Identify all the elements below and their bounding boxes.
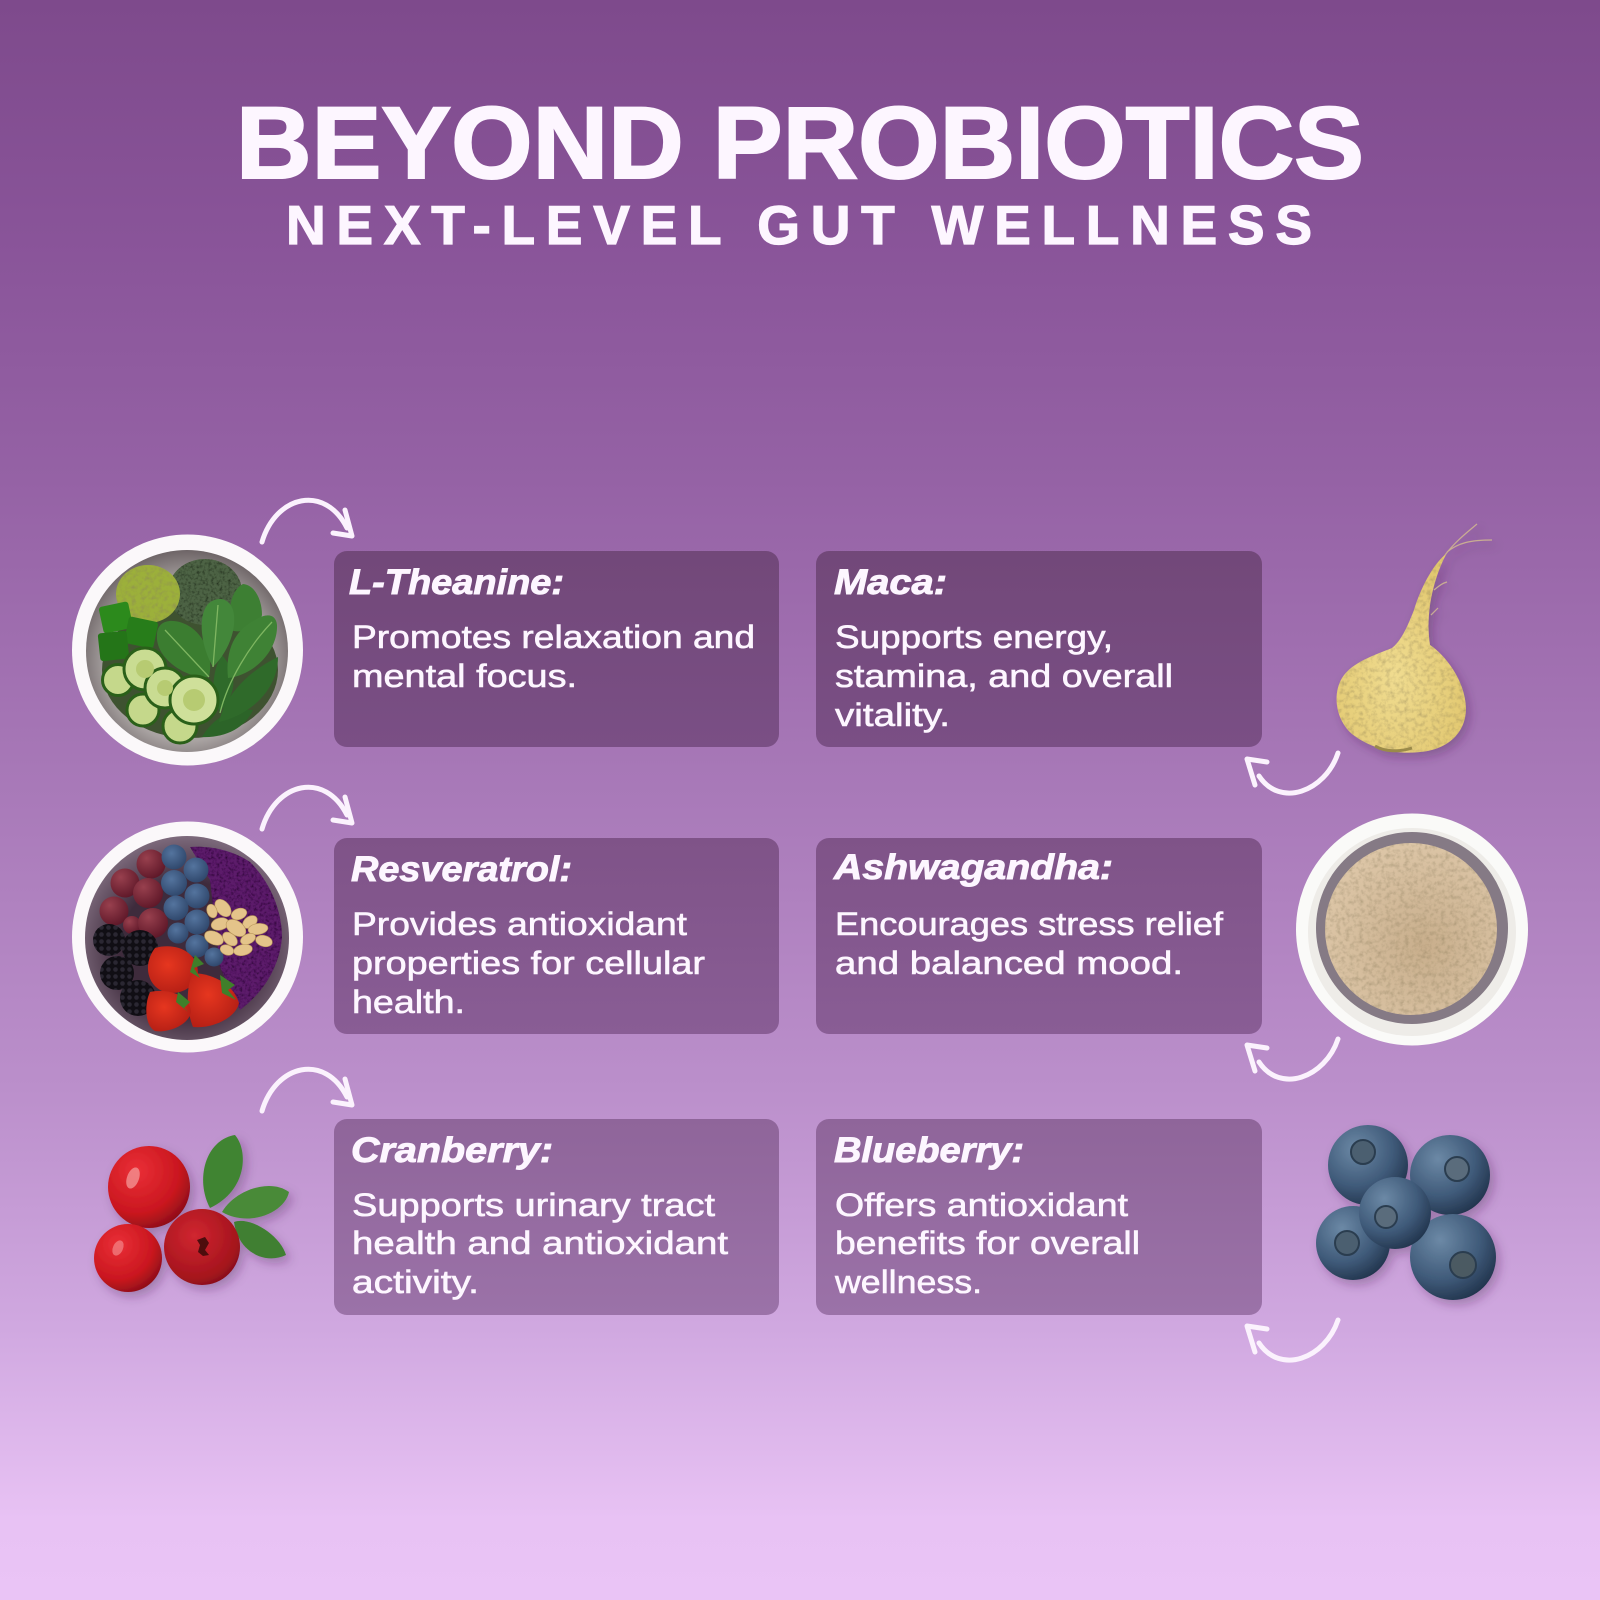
text: Cranberry description: health and antioxidant — [352, 1225, 728, 1261]
text: Maca description: stamina, and overall — [835, 658, 1173, 694]
heading: L-Theanine: L-Theanine: — [349, 563, 564, 602]
heading: Blueberry: Blueberry: — [834, 1131, 1024, 1170]
text: Blueberry description — [834, 1187, 1140, 1300]
text: L-Theanine description: mental focus. — [352, 658, 577, 694]
text: Resveratrol description: health. — [352, 984, 465, 1020]
text: Blueberry description: benefits for overall — [835, 1225, 1140, 1261]
icon: cranberries with leaves — [94, 1135, 289, 1292]
heading: Cranberry: Cranberry: — [351, 1131, 553, 1170]
icon: blueberries — [1316, 1125, 1496, 1300]
text: Maca description — [835, 619, 1173, 733]
arrow: ashwagandha to card — [1247, 1039, 1338, 1079]
text: L-Theanine description: Promotes relaxation and — [352, 619, 755, 655]
panel: Maca card — [816, 551, 1262, 747]
text: Cranberry description: Supports urinary tract — [352, 1187, 715, 1223]
text: L-Theanine description — [352, 619, 755, 694]
arrow: blueberry to card — [1247, 1320, 1338, 1360]
text: Ashwagandha description: and balanced mood. — [835, 945, 1183, 981]
text: Ashwagandha description — [835, 906, 1223, 981]
panel: L-Theanine card — [334, 551, 779, 747]
text: Cranberry description — [352, 1187, 728, 1300]
arrow: bowl to Resveratrol — [262, 787, 352, 829]
panel: Blueberry card — [816, 1119, 1262, 1315]
icon: ashwagandha powder bowl — [1296, 814, 1528, 1046]
heading: Maca: Maca: — [834, 563, 947, 602]
heading: Resveratrol: Resveratrol: — [351, 850, 572, 889]
panel: Resveratrol card — [334, 838, 779, 1034]
text: Maca description: Supports energy, — [835, 619, 1113, 655]
text: Maca description: vitality. — [835, 697, 950, 733]
text: Blueberry description: Offers antioxidant — [835, 1187, 1128, 1223]
icon: red fruit bowl for Resveratrol — [72, 822, 303, 1052]
title: BEYOND PROBIOTICS — [236, 86, 1364, 200]
text: Cranberry description: activity. — [352, 1264, 479, 1300]
text: Resveratrol description: properties for cellular — [352, 945, 705, 981]
arrow: bowl to L-Theanine — [262, 500, 352, 542]
text: Resveratrol description — [352, 906, 705, 1020]
subtitle: NEXT-LEVEL GUT WELLNESS — [286, 194, 1312, 256]
text: Blueberry description: wellness. — [834, 1264, 982, 1300]
arrow: maca to card — [1247, 753, 1338, 793]
icon: green bowl for L-Theanine — [72, 534, 303, 766]
arrow: cranberry to Cranberry card — [262, 1069, 352, 1111]
text: Ashwagandha description: Encourages stress relief — [835, 906, 1223, 942]
text: Resveratrol description: Provides antioxidant — [352, 906, 687, 942]
panel: Ashwagandha card — [816, 838, 1262, 1034]
heading: Ashwagandha: Ashwagandha: — [833, 848, 1113, 887]
icon: maca root — [1337, 524, 1492, 753]
panel: Cranberry card — [334, 1119, 779, 1315]
